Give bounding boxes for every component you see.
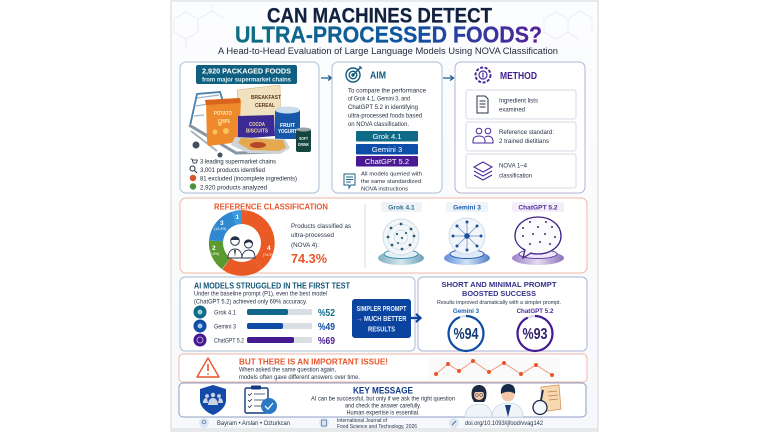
text: aim: ultra-processed foods based [348, 112, 422, 120]
card: reference standard: Reference standard: [499, 129, 554, 136]
food: fruit yogurt: YOGURT [278, 129, 298, 135]
text: instructions: All models queried with [361, 172, 422, 178]
arrow: first test to short prompt [411, 314, 420, 322]
panel: packaged foods [180, 62, 319, 193]
food: cocoa biscuits [238, 115, 275, 139]
text: aim: ChatGPT 5.2 in identifying [348, 104, 418, 111]
panel: important issue [179, 354, 587, 382]
bar: chatgpt: %69 [318, 336, 335, 347]
callout: simpler prompt: SIMPLER PROMPT [356, 304, 407, 313]
bar: gemini: Gemini 3 [214, 324, 237, 330]
pill: gemini: Gemini 3 [372, 145, 402, 154]
illustration: shopping cart with foods [189, 85, 311, 158]
heading: aim: AIM [370, 70, 386, 82]
callout: simpler prompt: → MUCH BETTER [356, 314, 407, 323]
model: gemini [444, 202, 490, 265]
icon: clipboard [245, 386, 277, 414]
footer: journal [319, 418, 417, 430]
bar: grok [194, 306, 335, 319]
icon: dietitians [228, 237, 255, 258]
icon: note [344, 174, 355, 188]
heading: short prompt: SHORT AND MINIMAL PROMPT [442, 280, 557, 289]
text: baseline prompt [194, 292, 327, 306]
stat: chatgpt 93 [517, 308, 554, 351]
bar: chatgpt: ChatGPT 5.2 [214, 338, 245, 344]
list: sample flow [190, 158, 297, 192]
food: cocoa biscuits: BISCUITS [246, 128, 268, 134]
list: sample flow: 3 leading supermarket chains [200, 158, 276, 166]
arrow: aim to method [443, 76, 454, 80]
heading: short prompt [442, 280, 557, 298]
text: issue: models often gave different answers over time. [239, 375, 360, 381]
donut chart: (2.6%) [209, 252, 219, 256]
line chart: fluctuating answers [428, 357, 560, 380]
text: products classified: Products classified as [291, 223, 352, 230]
text: issue [239, 368, 360, 381]
bar: chatgpt [194, 334, 335, 347]
stat: gemini 94 [448, 308, 484, 351]
text: key message: Human expertise is essential. [346, 410, 420, 416]
footer: doi [449, 418, 544, 428]
text: baseline prompt: (ChatGPT 5.2) achieved only 69% accuracy. [194, 300, 307, 306]
text: aim [348, 88, 426, 128]
pill: chatgpt: ChatGPT 5.2 [365, 157, 409, 166]
model: grok [378, 202, 424, 265]
food: fruit yogurt [275, 106, 300, 139]
text: baseline prompt: Under the baseline prompt (P1), even the best model [194, 292, 327, 298]
donut chart: (74.3%) [263, 253, 275, 257]
panel: key message [179, 383, 586, 417]
stat: 74.3 percent: 74.3% [291, 251, 327, 266]
icon: shield [200, 385, 226, 415]
footer: doi: doi.org/10.1093/ijfood/vvag142 [465, 421, 544, 427]
footer: authors: Bayram • Arslan • Ozturkcan [217, 421, 290, 427]
card: reference standard [466, 122, 576, 151]
food: cereal box: BREAKFAST [251, 95, 282, 101]
list: sample flow: 81 excluded (incomplete ingredients) [200, 176, 297, 182]
subtitle: A Head-to-Head Evaluation of Large Language Models Using NOVA Classification [218, 46, 558, 56]
heading: reference: REFERENCE CLASSIFICATION [214, 202, 328, 212]
food: ready meal tray [231, 137, 290, 154]
text: aim: of Grok 4.1, Gemini 3, and [348, 96, 410, 102]
icon: gear [476, 68, 490, 82]
footer: journal: International Journal of [337, 418, 388, 424]
food: soft drink can: SOFT [299, 136, 308, 141]
panel: aim [332, 62, 442, 193]
text: aim: To compare the performance [348, 88, 426, 94]
food: potato chips [205, 98, 241, 146]
stat: chatgpt 93: ChatGPT 5.2 [517, 308, 554, 315]
card: nova classification: classification [499, 172, 532, 180]
icon: target [346, 66, 362, 82]
title: CAN MACHINES DETECT [267, 4, 492, 28]
donut chart [209, 210, 275, 276]
callout: simpler prompt: RESULTS [368, 324, 395, 334]
footer: journal: Food Science and Technology, 2026 [337, 424, 417, 430]
text: instructions [361, 172, 422, 192]
bar: gemini: %49 [318, 322, 335, 333]
decorative hexagons [174, 4, 592, 48]
panel: short prompt [418, 277, 587, 351]
card: ingredient lists [466, 90, 576, 119]
card: ingredient lists: examined [499, 106, 525, 114]
footer: authors [199, 418, 290, 428]
bar: gemini [194, 320, 335, 333]
arrow: foods to aim [321, 76, 332, 80]
model: chatgpt [512, 202, 564, 265]
card: ingredient lists: Ingredient lists [499, 98, 538, 104]
food: potato chips: POTATO [214, 111, 233, 117]
header: packaged foods: from major supermarket chains [202, 76, 292, 84]
card: reference standard: 2 trained dietitians [499, 138, 549, 145]
text: instructions: the same standardized [361, 179, 421, 185]
food: cereal box: CEREAL [255, 103, 276, 109]
title [235, 4, 542, 48]
bar: grok: %52 [318, 308, 335, 319]
food: cocoa biscuits: COCOA [249, 122, 265, 128]
model: gemini: Gemini 3 [453, 204, 481, 212]
list: sample flow: 3,001 products identified [200, 167, 266, 174]
text: key message: AI can be successful, but only if we ask the right question [311, 396, 455, 402]
donut chart: 1 [236, 214, 240, 221]
model: grok: Grok 4.1 [388, 204, 415, 212]
text: products classified [291, 223, 352, 249]
text: products classified: (NOVA 4): [291, 242, 319, 249]
text: results improved: Results improved dramatically with a simpler prompt. [437, 300, 561, 306]
heading: key message: KEY MESSAGE [353, 386, 413, 396]
heading: method: METHOD [500, 71, 537, 82]
divider [364, 204, 366, 268]
food: cereal box [237, 85, 282, 123]
food: potato chips: CHIPS [218, 119, 230, 125]
food: fruit yogurt: FRUIT [280, 123, 296, 129]
pill: grok: Grok 4.1 [372, 132, 402, 141]
donut chart: 2 [212, 245, 216, 252]
panel: method [455, 62, 585, 193]
card: nova classification: NOVA 1–4 [499, 162, 527, 170]
text: aim: on NOVA classification. [348, 121, 409, 128]
food: soft drink can [296, 128, 311, 152]
donut chart: 4 [267, 245, 271, 252]
icon: warning [197, 358, 219, 377]
list: sample flow: 2,920 products analyzed [200, 184, 268, 192]
header: packaged foods: 2,920 PACKAGED FOODS [202, 66, 291, 76]
stat: gemini 94: Gemini 3 [453, 308, 480, 315]
donut chart: (13.4%) [214, 227, 226, 231]
text: instructions: NOVA instructions [361, 186, 408, 192]
text: key message [311, 396, 455, 416]
text: key message: and check the answer carefully. [345, 402, 421, 410]
donut chart: 3 [220, 220, 224, 227]
heading: first test: AI MODELS STRUGGLED IN THE FIRST TEST [194, 282, 350, 290]
heading: issue: BUT THERE IS AN IMPORTANT ISSUE! [239, 358, 388, 366]
stat: gemini 94: %94 [454, 326, 479, 343]
panel: first test [180, 277, 415, 351]
page frame [171, 1, 598, 431]
title: ULTRA-PROCESSED FOODS? [235, 22, 542, 48]
stat: chatgpt 93: %93 [522, 326, 548, 343]
icon: magnified document [533, 385, 561, 414]
card: nova classification [466, 154, 576, 188]
text: products classified: ultra-processed [291, 232, 334, 239]
food: soft drink can: DRINK [298, 142, 310, 147]
icon: scientists [465, 384, 523, 417]
bar: grok: Grok 4.1 [214, 310, 237, 316]
header: packaged foods [196, 65, 297, 84]
heading: short prompt: BOOSTED SUCCESS [462, 289, 536, 298]
callout: simpler prompt [352, 299, 411, 338]
model: chatgpt: ChatGPT 5.2 [518, 204, 558, 212]
panel: reference classification [180, 198, 587, 276]
text: issue: When asked the same question again, [239, 368, 336, 374]
